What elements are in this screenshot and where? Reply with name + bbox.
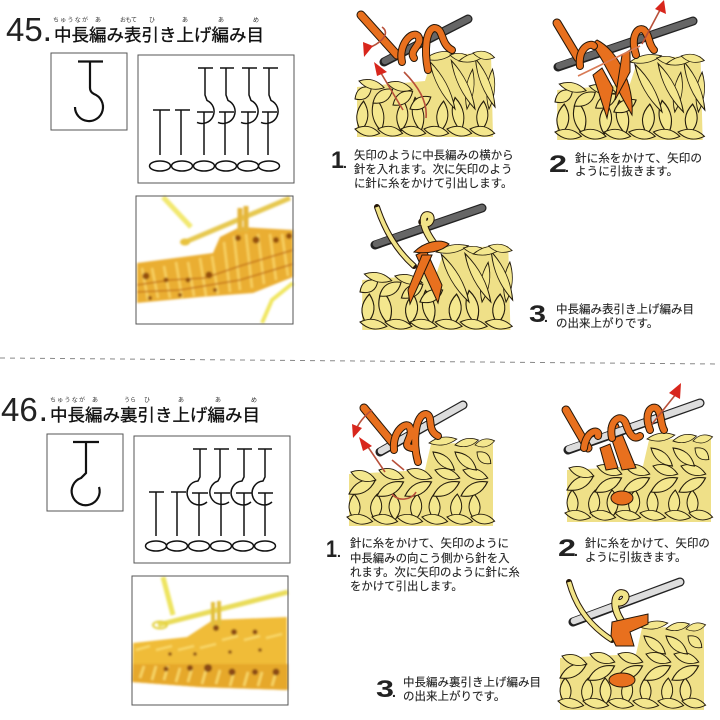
step 1 text 46: . <box>337 544 341 560</box>
step 1 text 45: 矢印のように中長編みの横から <box>354 148 513 162</box>
step 2 text 45: 針に糸をかけて、矢印の <box>575 151 702 165</box>
step 1 text 46 <box>326 536 520 593</box>
stitch chart 46 <box>134 436 290 563</box>
step 2 text 45: 2 <box>549 151 567 178</box>
section 46 title: ちゅうなが <box>50 396 85 404</box>
section 45 title <box>6 11 264 48</box>
step 3 text 45: の出来上がりです。 <box>556 316 658 330</box>
step 3 illustration 45 <box>357 207 517 331</box>
step 3 text 46: . <box>392 684 396 700</box>
section 45 title: あ <box>182 17 188 24</box>
step 3 text 46: の出来上がりです。 <box>403 689 505 703</box>
step 3 text 46: 3 <box>376 676 394 703</box>
section 45 title: あ <box>218 17 224 24</box>
section 45 title: おもて <box>120 17 137 24</box>
step 2 text 46 <box>558 535 710 564</box>
step 3 text 45: 中長編み表引き上げ編み目 <box>556 302 694 316</box>
step 1 text 45 <box>331 147 513 190</box>
step 2 text 46: 2 <box>558 535 576 562</box>
step 2 text 46: 針に糸をかけて、矢印の <box>585 536 710 550</box>
section 45 title: 45 <box>6 11 43 48</box>
step 2 text 45 <box>549 151 702 178</box>
section 46 title: . <box>40 400 47 427</box>
section 46 title: 中長編み裏引き上げ編み目 <box>50 405 260 425</box>
section 46 title: あ <box>178 397 184 404</box>
section 46 title: ひ <box>144 397 150 404</box>
step 1 text 46: 針に糸をかけて、矢印のように <box>350 536 509 550</box>
photo 46 <box>132 576 288 705</box>
step 1 text 46: 1 <box>326 536 337 563</box>
section 46 title: め <box>251 397 257 404</box>
step 1 text 45: に針に糸をかけて引出します。 <box>354 176 512 190</box>
step 1 illustration 46 <box>346 405 495 526</box>
step 2 text 45: . <box>565 159 569 175</box>
section 45 title: . <box>44 20 51 47</box>
step 1 illustration 45 <box>352 15 499 138</box>
stitch chart 45 <box>138 55 294 183</box>
step 2 illustration 46 <box>564 383 713 522</box>
section 46 title <box>1 391 260 428</box>
section 46 title: うら <box>124 397 136 404</box>
section 46 title: 46 <box>1 391 38 428</box>
step 1 text 45: 針を入れます。次に矢印のよう <box>354 162 512 176</box>
step 3 text 45: 3 <box>529 301 546 328</box>
step 3 text 46 <box>376 675 541 703</box>
section 45 title: ちゅうなが <box>53 16 88 24</box>
step 2 illustration 45 <box>552 0 709 141</box>
section 46 title: あ <box>92 397 98 404</box>
step 1 text 45: . <box>343 155 347 171</box>
section 46 title: あ <box>215 397 221 404</box>
step 2 text 45: ように引抜きます。 <box>575 164 678 178</box>
symbol box 45 <box>51 53 127 130</box>
photo 45 <box>136 196 293 324</box>
section 45 title: ひ <box>149 17 155 24</box>
step 2 text 46: . <box>574 543 578 559</box>
section 45 title: め <box>253 17 259 24</box>
step 3 text 45: . <box>544 309 548 325</box>
step 1 text 45: 1 <box>331 147 344 174</box>
step 3 illustration 46 <box>557 582 706 710</box>
step 2 text 46: ように引抜きます。 <box>585 550 686 564</box>
step 3 text 45 <box>529 301 694 330</box>
step 1 text 46: をかけて引出します。 <box>350 579 463 593</box>
step 1 text 46: 中長編みの向こう側から針を入 <box>350 551 510 565</box>
step 3 text 46: 中長編み裏引き上げ編み目 <box>403 675 541 689</box>
section 45 title: 中長編み表引き上げ編み目 <box>54 25 264 45</box>
step 1 text 46: れます。次に矢印のように針に糸 <box>350 565 520 579</box>
symbol box 46 <box>47 434 123 511</box>
section 45 title: あ <box>95 17 101 24</box>
